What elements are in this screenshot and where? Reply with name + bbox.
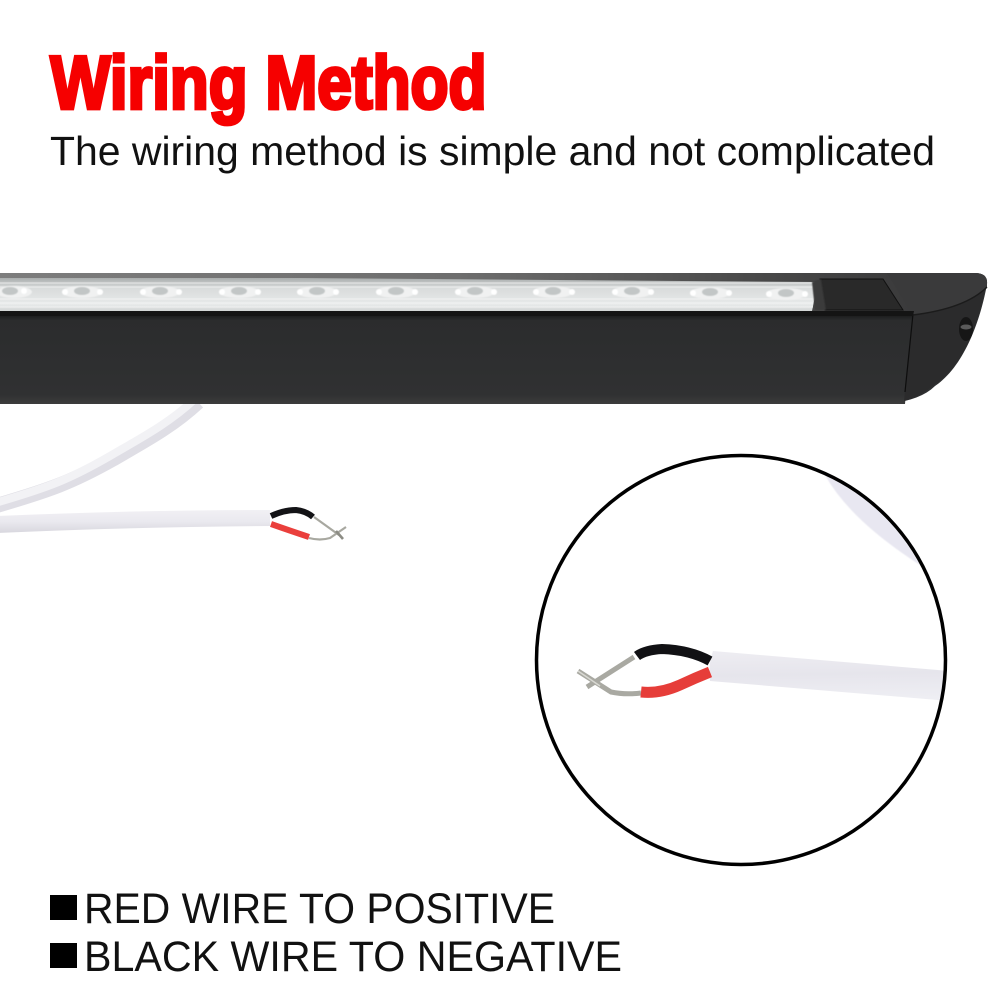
legend: black wire: BLACK WIRE TO NEGATIVE: [84, 933, 622, 981]
red wire: [271, 524, 309, 537]
LED lenses: [0, 286, 808, 300]
lens strip: [0, 278, 818, 311]
front face: [0, 313, 913, 404]
screw hole: [959, 317, 973, 341]
title: Wiring: [50, 40, 248, 124]
magnified detail circle: [536, 456, 950, 864]
bullet square: [50, 895, 77, 920]
white sheath: [0, 510, 270, 533]
circle outline: [536, 456, 946, 864]
small cable with stripped wires: [0, 510, 346, 540]
dark sensor panel: [820, 279, 903, 310]
title: Method: [266, 40, 486, 124]
top band: [0, 273, 913, 312]
silver wires: [578, 657, 641, 694]
silver wire ends: [309, 517, 346, 540]
end cap: [904, 288, 985, 401]
red wire: [641, 672, 710, 692]
legend: red wire: RED WIRE TO POSITIVE: [84, 885, 555, 933]
lens ridges: [0, 283, 815, 307]
black wire: [271, 510, 313, 517]
faint cable in circle: [825, 475, 920, 565]
subtitle: The wiring method is simple and not complicated: [50, 128, 935, 174]
large white sheath: [709, 651, 950, 701]
title: [50, 40, 486, 124]
bullet square: [50, 943, 77, 968]
LED light bar: [0, 273, 987, 404]
white cable behind the light bar: [0, 399, 198, 506]
black wire: [637, 649, 710, 661]
bar housing: [0, 273, 987, 404]
